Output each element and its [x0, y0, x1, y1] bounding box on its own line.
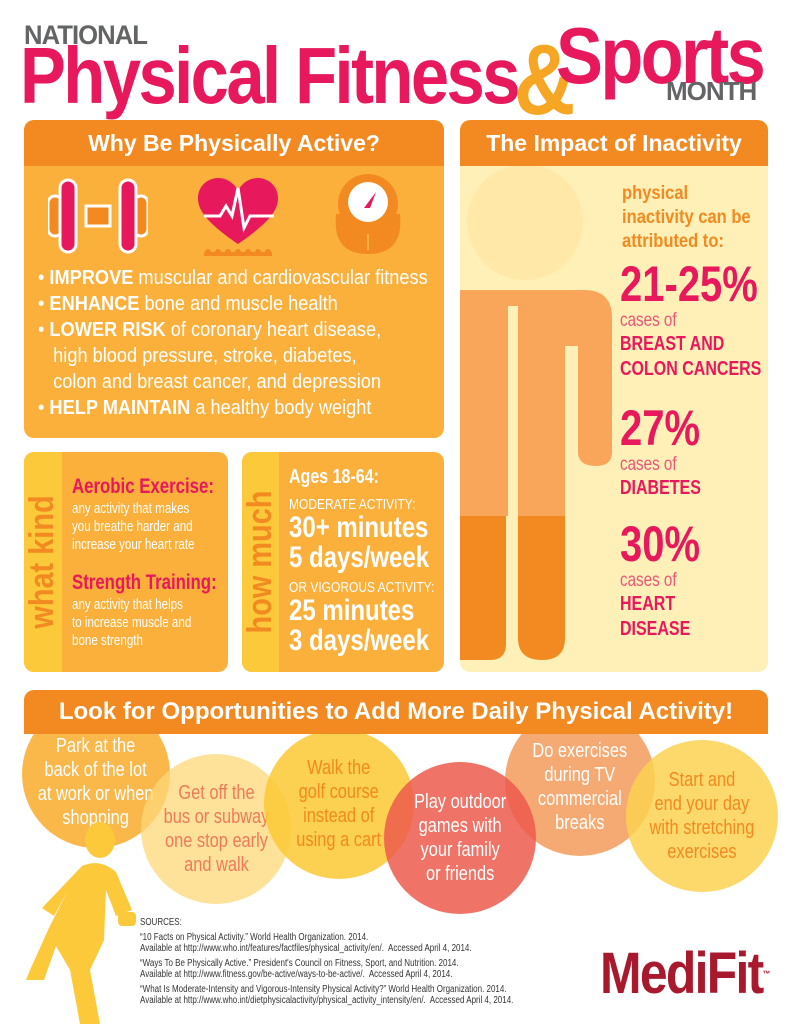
heading: impact of inactivity: The Impact of Inactivity	[486, 130, 742, 156]
stat: 27%: cases of	[620, 454, 677, 475]
text: aerobic exercise: you breathe harder and	[72, 519, 193, 535]
label: how much: how much	[242, 491, 279, 633]
circle: play outdoor: or friends	[426, 863, 494, 885]
label: how much	[242, 452, 279, 672]
stat: 27%: DIABETES	[620, 477, 701, 499]
circle: walk golf: instead of	[303, 805, 375, 827]
banner: look for opportunities: Look for Opportunities to Add More Daily Physical Activity!	[59, 698, 733, 725]
heading: why be physically active	[24, 120, 444, 166]
text: activity amounts: 30+ minutes	[289, 511, 428, 544]
text: attributed to	[622, 183, 751, 252]
logo: MediFit: MediFit™	[600, 941, 770, 1006]
text: activity amounts: OR VIGOROUS ACTIVITY:	[289, 579, 434, 596]
circle: get off bus	[141, 754, 291, 904]
circle: do exercises: during TV	[545, 764, 615, 786]
circle: park: back of the lot	[45, 759, 147, 781]
heading: impact of inactivity	[460, 120, 768, 166]
text: benefits list: • IMPROVE muscular and cardiovascular fitness	[38, 267, 428, 289]
text: strength training: Strength Training:	[72, 571, 217, 594]
text: benefits list: • LOWER RISK of coronary heart disease,	[38, 319, 381, 341]
text: aerobic exercise: Aerobic Exercise:	[72, 475, 214, 498]
stat: 27%	[620, 400, 701, 499]
text: benefits list	[38, 267, 428, 419]
circle: park	[22, 700, 170, 848]
text: activity amounts: 25 minutes	[289, 594, 414, 627]
circle: get off bus: Get off the	[178, 782, 254, 804]
heading: why be physically active: Why Be Physically Active?	[88, 130, 380, 156]
text: benefits list: colon and breast cancer, and depression	[53, 371, 381, 393]
label: what kind: what kind	[24, 495, 61, 629]
text: activity amounts	[289, 466, 434, 657]
text: activity amounts: MODERATE ACTIVITY:	[289, 496, 415, 513]
text: attributed to: inactivity can be	[622, 207, 751, 228]
icon: dumbbell	[48, 178, 148, 254]
text: sources: “10 Facts on Physical Activity.” World Health Organization. 2014.	[140, 932, 368, 942]
stat: 21-25%: 21-25%	[620, 256, 758, 312]
circle: play outdoor: Play outdoor	[414, 791, 506, 813]
panel: impact of inactivity	[460, 120, 768, 672]
circle: play outdoor: games with	[419, 815, 501, 837]
circle: stretching	[626, 740, 778, 892]
icon: heart	[198, 178, 278, 256]
stat: 21-25%	[620, 256, 761, 380]
text: aerobic exercise	[72, 475, 214, 553]
text: strength training: any activity that helps	[72, 597, 183, 613]
circle: get off bus: bus or subway	[163, 806, 269, 828]
circle: get off bus: and walk	[184, 854, 248, 876]
panel: what kind	[24, 452, 228, 672]
circle: walk golf	[264, 729, 414, 879]
circle: walk golf: using a cart	[297, 829, 381, 851]
title: Sports: Sports	[556, 11, 763, 100]
circle: do exercises: commercial	[538, 788, 622, 810]
circle: play outdoor: your family	[420, 839, 500, 861]
text: attributed to: physical	[622, 183, 688, 204]
circle: park: shopping	[63, 807, 129, 829]
text: sources: Available at http://www.who.int/dietphysicalactivity/physical_activity_intensity/en/. Accessed April 4, 2014.	[140, 995, 513, 1006]
title	[20, 11, 763, 136]
circle: do exercises	[505, 706, 655, 856]
text: sources: Available at http://www.fitness.gov/be-active/ways-to-be-active/. Accessed April 4, 2014.	[140, 969, 452, 980]
circle: walk golf: golf course	[299, 781, 379, 803]
stat: 21-25%: COLON CANCERS	[620, 358, 761, 380]
circle: stretching: with stretching	[650, 817, 754, 839]
circle: do exercises: breaks	[555, 812, 605, 834]
title: NATIONAL: NATIONAL	[24, 20, 147, 50]
panel: why be physically active	[24, 120, 444, 438]
text: sources: Available at http://www.who.int/features/factfiles/physical_activity/en/. Accessed April 4, 2014.	[140, 943, 472, 954]
icon: human figure	[460, 166, 612, 660]
text: activity amounts: Ages 18-64:	[289, 466, 379, 488]
text: activity amounts: 5 days/week	[289, 541, 429, 574]
stat: 21-25%: BREAST AND	[620, 333, 724, 355]
text: benefits list: high blood pressure, stroke, diabetes,	[53, 345, 357, 367]
text: sources: SOURCES:	[140, 917, 182, 928]
text: sources: “Ways To Be Physically Active.” President's Council on Fitness, Sport, and Nutrition. 2014.	[140, 958, 459, 968]
circle: play outdoor	[384, 762, 536, 914]
circle: stretching: exercises	[667, 841, 737, 863]
stat: 21-25%: cases of	[620, 310, 677, 331]
title: ampersand: &	[514, 24, 575, 136]
text: aerobic exercise: increase your heart rate	[72, 537, 195, 553]
circle: do exercises: Do exercises	[533, 740, 627, 762]
stat: 30%: DISEASE	[620, 618, 690, 640]
circle: stretching: Start and	[669, 769, 735, 791]
label: what kind	[24, 452, 62, 672]
text: sources	[140, 917, 513, 1006]
banner: look for opportunities	[24, 690, 768, 734]
circle: walk golf: Walk the	[307, 757, 371, 779]
stat: 27%: 27%	[620, 400, 700, 456]
text: benefits list: • ENHANCE bone and muscle health	[38, 293, 338, 315]
title: MONTH: MONTH	[666, 76, 756, 106]
stat: 30%: 30%	[620, 516, 700, 572]
panel: how much	[242, 452, 444, 672]
text: strength training: to increase muscle and	[72, 615, 191, 631]
text: sources: “What Is Moderate-Intensity and Vigorous-Intensity Physical Activity?” World Health Organization. 2014.	[140, 984, 507, 994]
text: strength training	[72, 571, 217, 649]
icon: scale	[336, 174, 400, 254]
icon: runner	[26, 822, 136, 1024]
circle: park: at work or when	[38, 783, 154, 805]
stat: 30%: HEART	[620, 593, 675, 615]
stat: 30%	[620, 516, 700, 640]
stat: 30%: cases of	[620, 570, 677, 591]
circle: park: Park at the	[56, 735, 136, 757]
text: strength training: bone strength	[72, 633, 143, 649]
text: aerobic exercise: any activity that makes	[72, 501, 189, 517]
circle: get off bus: one stop early	[164, 830, 268, 852]
text: benefits list: • HELP MAINTAIN a healthy body weight	[38, 397, 371, 419]
circle: stretching: end your day	[655, 793, 749, 815]
title: Physical Fitness: Physical Fitness	[20, 31, 518, 120]
text: activity amounts: 3 days/week	[289, 624, 429, 657]
text: attributed to: attributed to:	[622, 231, 724, 252]
